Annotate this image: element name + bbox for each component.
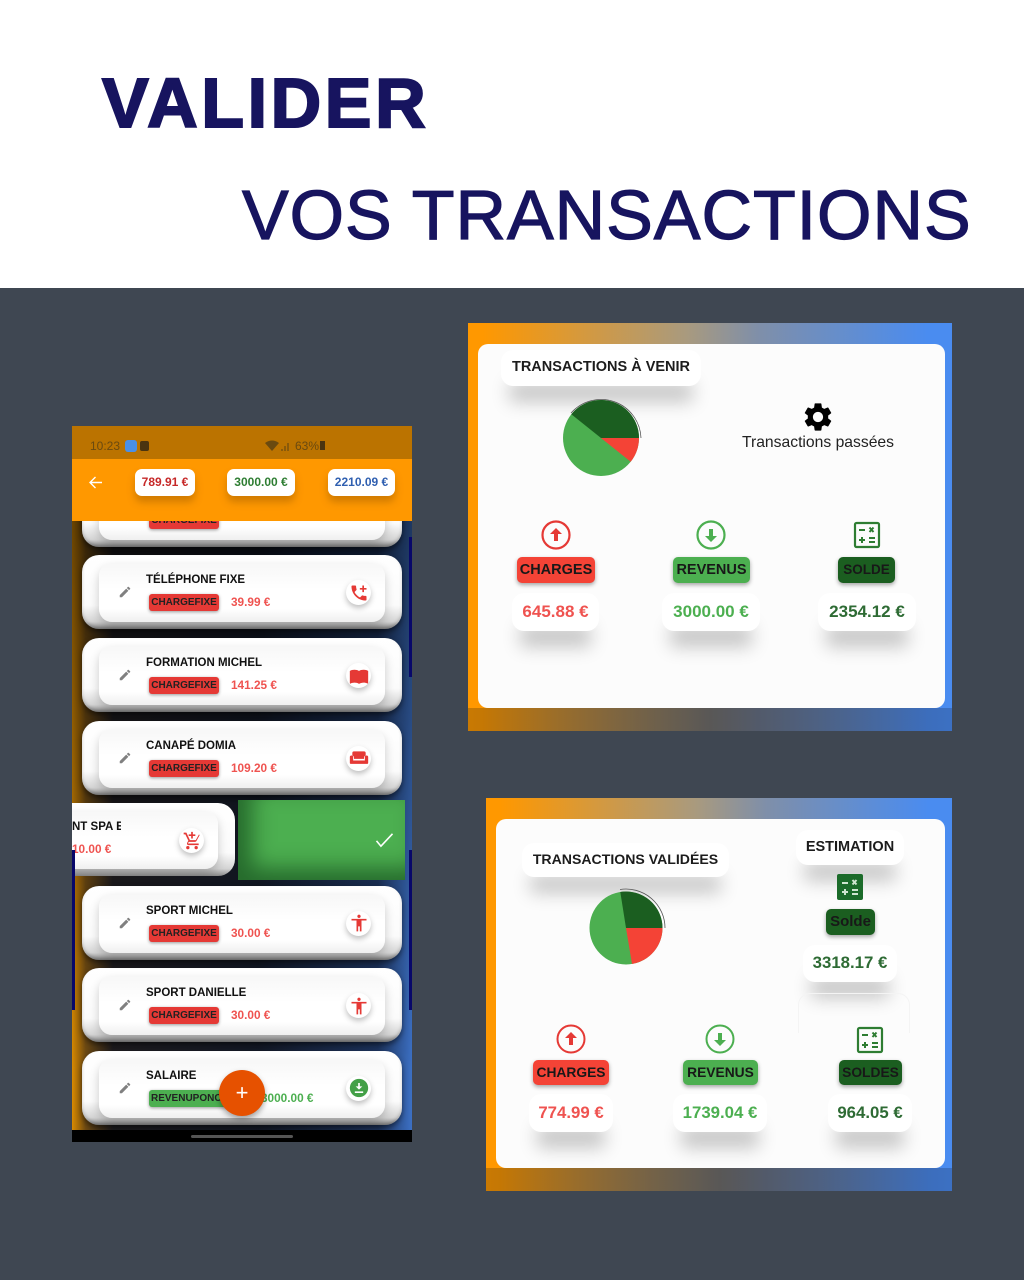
label: solde bbox=[838, 557, 895, 583]
header value: solde bbox=[328, 469, 395, 496]
panel: transactions validées bbox=[486, 798, 952, 1191]
pie chart bbox=[563, 399, 642, 476]
value: revenus bbox=[662, 593, 760, 631]
icon: charges arrow up bbox=[556, 1024, 586, 1054]
card: formation michel: 141.25 € bbox=[231, 678, 277, 692]
label: charges: CHARGES bbox=[536, 1065, 606, 1080]
heading box: TRANSACTIONS VALIDÉES bbox=[533, 851, 718, 867]
subtitle: VOS TRANSACTIONS: VOS TRANSACTIONS bbox=[242, 176, 972, 254]
battery level: 63% bbox=[295, 439, 319, 453]
value: charges bbox=[529, 1094, 613, 1132]
card: formation michel: CHARGEFIXE bbox=[151, 680, 217, 691]
card: formation michel bbox=[82, 638, 402, 712]
card: canapé domia: 109.20 € bbox=[231, 760, 277, 774]
card: sport michel: CHARGEFIXE bbox=[151, 928, 217, 938]
card: sport danielle: 30.00 € bbox=[231, 1008, 270, 1022]
card: sport danielle: CHARGEFIXE bbox=[151, 1010, 217, 1021]
heading box bbox=[501, 350, 701, 386]
icon: calculator filled bbox=[837, 874, 863, 900]
card: salaire: 3000.00 € bbox=[261, 1090, 313, 1104]
value: charges bbox=[512, 593, 599, 631]
icon: calculator outline bbox=[856, 1026, 884, 1054]
title: VALIDER: VALIDER bbox=[102, 64, 429, 142]
value: solde estimation bbox=[803, 945, 897, 982]
value: solde bbox=[818, 593, 916, 631]
card: sport michel: 30.00 € bbox=[231, 926, 270, 940]
heading box: estimation bbox=[796, 830, 904, 865]
value: charges: 645.88 € bbox=[522, 602, 589, 621]
home indicator bbox=[191, 1135, 293, 1138]
icon: settings gear bbox=[804, 403, 832, 431]
label: soldes bbox=[839, 1060, 902, 1085]
clock: 10:23 bbox=[90, 439, 120, 453]
header value: revenus: 3000.00 € bbox=[234, 475, 288, 489]
label: soldes: SOLDES bbox=[842, 1065, 899, 1080]
navy edge bar right upper bbox=[409, 537, 412, 677]
header value: revenus bbox=[227, 469, 295, 496]
notification icon bbox=[125, 440, 137, 452]
link: transactions passées: Transactions passées bbox=[742, 434, 894, 451]
header value: solde: 2210.09 € bbox=[335, 475, 388, 489]
panel: phone screenshot bbox=[72, 426, 412, 1142]
value: charges: 774.99 € bbox=[538, 1103, 604, 1122]
card: salaire: SALAIRE bbox=[146, 1070, 196, 1082]
dark background bbox=[0, 288, 1024, 1280]
card: sport danielle bbox=[82, 968, 402, 1042]
card: sport danielle: SPORT DANIELLE bbox=[146, 987, 246, 999]
app bar bbox=[72, 459, 412, 521]
icon: back arrow bbox=[89, 476, 102, 488]
swipe action: validate bbox=[238, 800, 405, 880]
label: solde: SOLDE bbox=[843, 562, 890, 577]
value: revenus: 1739.04 € bbox=[683, 1103, 757, 1122]
card: canapé domia bbox=[82, 720, 402, 794]
label: revenus bbox=[683, 1060, 758, 1085]
icon: revenus arrow down bbox=[706, 1024, 734, 1054]
label: charges bbox=[533, 1060, 609, 1085]
header value: charges bbox=[135, 469, 195, 496]
icon: cart bbox=[179, 828, 204, 853]
card: canapé domia: CHARGEFIXE bbox=[151, 762, 217, 774]
value: revenus: 3000.00 € bbox=[673, 602, 749, 621]
value: revenus bbox=[673, 1094, 767, 1132]
card: canapé domia: CANAPÉ DOMIA bbox=[146, 740, 236, 752]
icon: calculator outline bbox=[854, 522, 880, 548]
white card bbox=[478, 344, 945, 708]
navy edge bar right lower bbox=[409, 850, 412, 1010]
value: solde estimation: 3318.17 € bbox=[813, 953, 887, 972]
icon: revenus arrow down bbox=[696, 520, 726, 550]
value: soldes: 964.05 € bbox=[837, 1103, 903, 1122]
status bar bbox=[72, 426, 412, 459]
value: soldes bbox=[828, 1094, 912, 1132]
value: solde: 2354.12 € bbox=[829, 602, 905, 621]
heading box: estimation: ESTIMATION bbox=[806, 839, 894, 855]
bottom navigation bar bbox=[72, 1130, 412, 1142]
card: téléphone fixe: 39.99 € bbox=[231, 595, 270, 609]
partial card bbox=[82, 473, 402, 547]
heading box: TRANSACTIONS À VENIR bbox=[512, 359, 690, 375]
label: charges bbox=[517, 557, 595, 583]
inner swiped card bbox=[52, 811, 218, 869]
partial card: CHARGEFIXE bbox=[151, 515, 217, 526]
pie chart bbox=[590, 888, 666, 964]
clipped amount: 10.00 € bbox=[72, 842, 111, 856]
bottom shaded strip bbox=[486, 1168, 952, 1191]
label: revenus: REVENUS bbox=[676, 562, 747, 578]
card: sport michel: SPORT MICHEL bbox=[146, 904, 233, 916]
label: solde estimation bbox=[826, 909, 875, 935]
card: salaire bbox=[82, 1050, 402, 1124]
icon: check bbox=[376, 833, 393, 848]
label: revenus bbox=[673, 557, 750, 583]
navy edge bar left bbox=[72, 850, 75, 1010]
icon: charges arrow up bbox=[541, 520, 571, 550]
label: charges: CHARGES bbox=[520, 562, 592, 578]
card: téléphone fixe: CHARGEFIXE bbox=[151, 597, 217, 608]
swiped card: spa bbox=[72, 803, 235, 876]
label: revenus: REVENUS bbox=[687, 1065, 754, 1080]
heading box bbox=[522, 843, 729, 877]
list background bbox=[72, 521, 412, 1131]
white card bbox=[496, 819, 945, 1168]
card: téléphone fixe: TÉLÉPHONE FIXE bbox=[146, 574, 245, 586]
file icon bbox=[140, 441, 149, 451]
bottom shaded strip bbox=[468, 708, 952, 731]
panel: transactions à venir bbox=[468, 323, 952, 731]
label: solde estimation: Solde bbox=[830, 913, 871, 930]
card: formation michel: FORMATION MICHEL bbox=[146, 657, 262, 669]
icon: wifi and signal bbox=[265, 440, 289, 451]
card: téléphone fixe bbox=[82, 555, 402, 629]
floating add button bbox=[219, 1070, 265, 1116]
floating add button: + bbox=[236, 1080, 248, 1105]
icon: battery bbox=[320, 441, 325, 450]
ghost card outline bbox=[798, 993, 910, 1033]
card: sport michel bbox=[82, 886, 402, 960]
header value: charges: 789.91 € bbox=[142, 475, 188, 489]
